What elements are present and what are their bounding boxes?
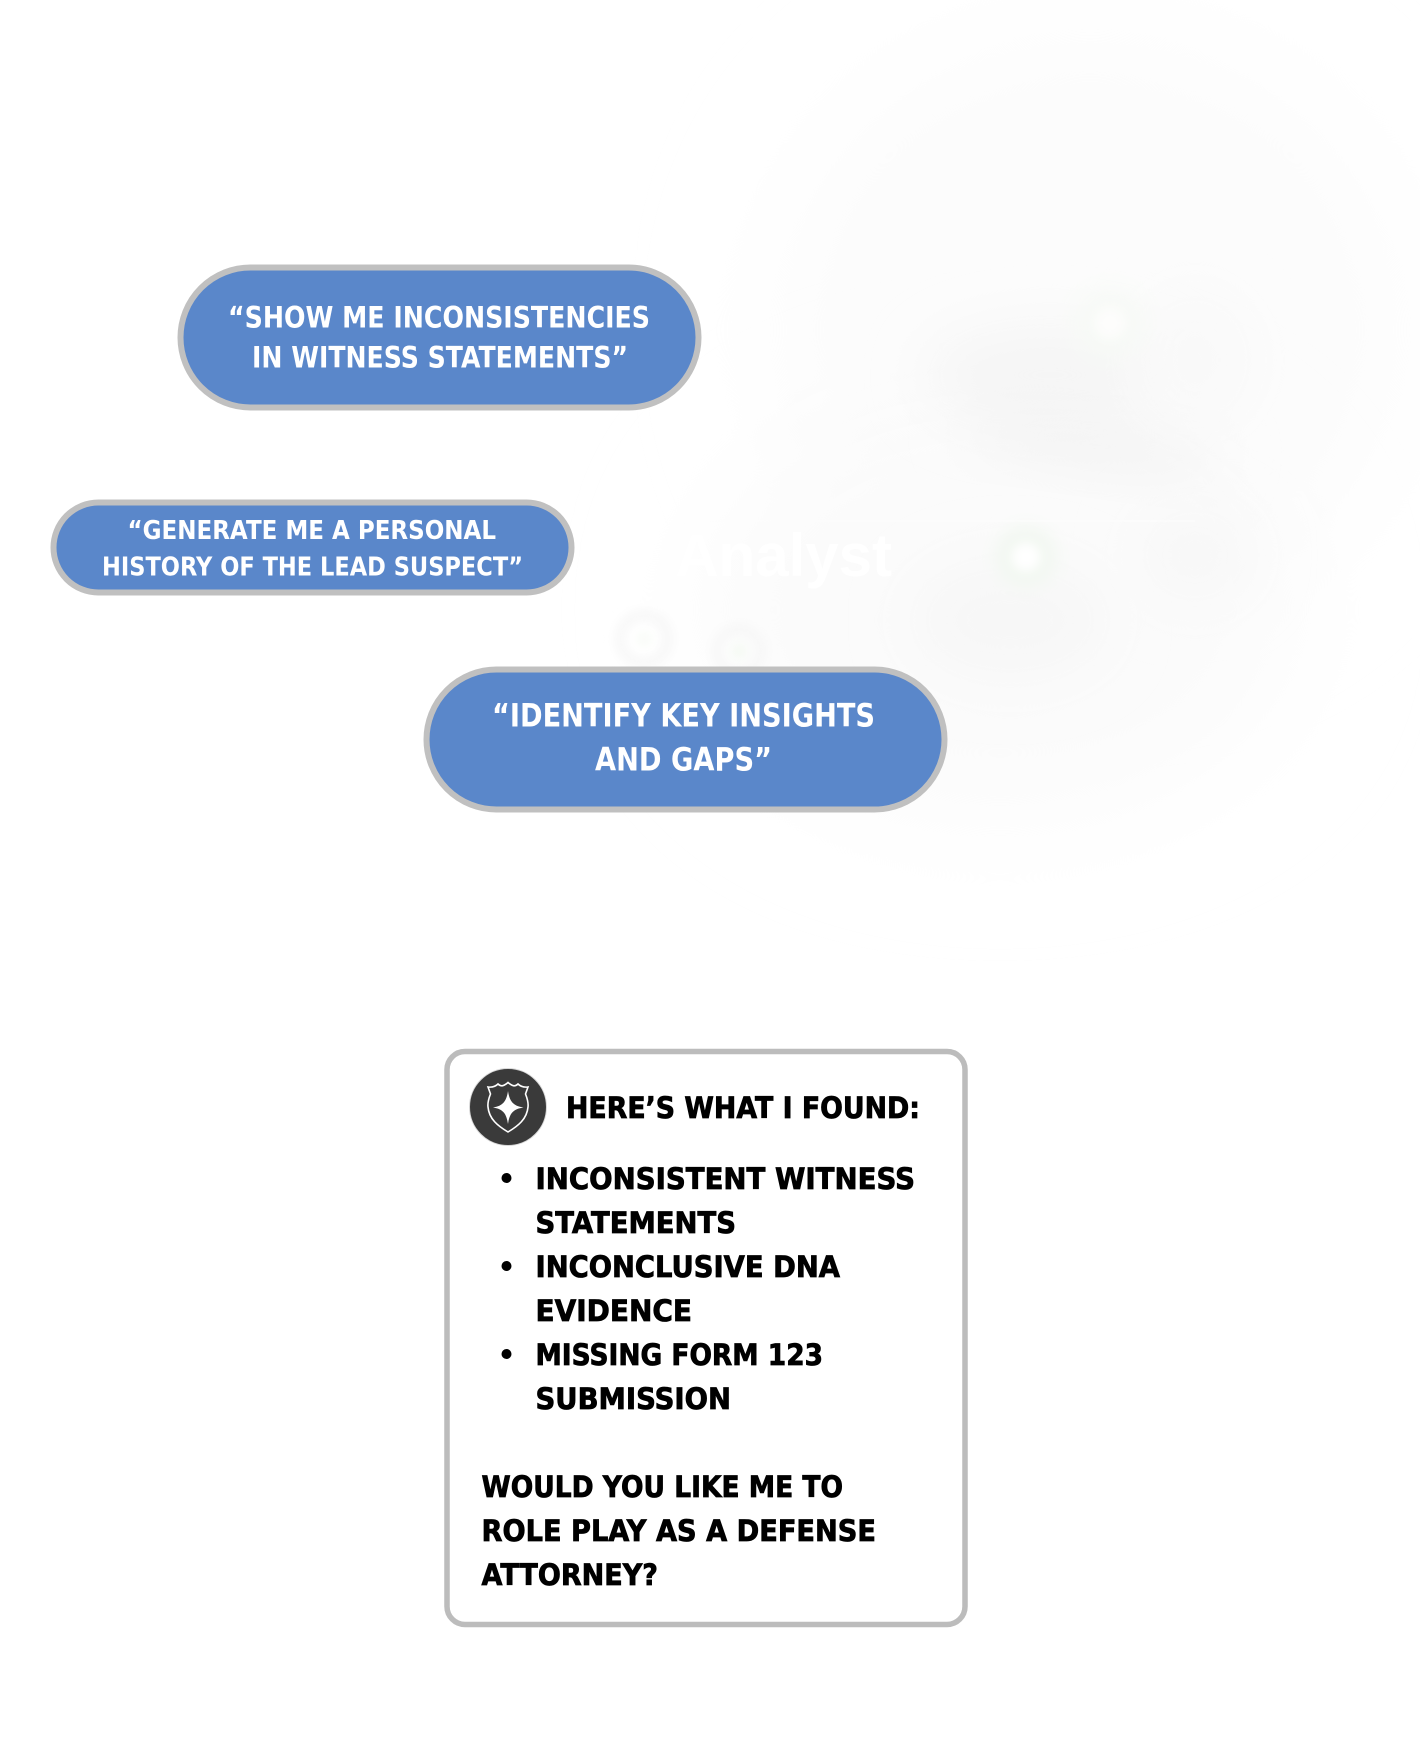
- card heading: HERE’S WHAT I FOUND:: [566, 1091, 920, 1125]
- follow-up question: ATTORNEY?: [482, 1558, 658, 1592]
- findings list: SUBMISSION: [536, 1382, 731, 1416]
- findings list: [502, 1162, 915, 1416]
- findings list: INCONSISTENT WITNESS: [536, 1162, 915, 1196]
- response card: [447, 1052, 965, 1624]
- prompt bubble: key insights: [426, 670, 944, 810]
- findings list: INCONCLUSIVE DNA: [536, 1250, 841, 1284]
- faint heading text: Analyst: [675, 522, 892, 589]
- prompt bubble: inconsistencies: [180, 268, 698, 408]
- background: faint blurred eye graphic: [620, 30, 1410, 820]
- prompt bubble: inconsistencies: IN WITNESS STATEMENTS”: [252, 340, 628, 374]
- icon: police badge: [470, 1068, 546, 1146]
- follow-up question: [482, 1470, 876, 1592]
- prompt bubble: personal history: “GENERATE ME A PERSONAL: [128, 516, 496, 546]
- prompt bubble: personal history: [54, 502, 572, 592]
- prompt bubble: key insights: AND GAPS”: [595, 740, 772, 778]
- findings list: EVIDENCE: [536, 1294, 692, 1328]
- follow-up question: ROLE PLAY AS A DEFENSE: [482, 1514, 876, 1548]
- prompt bubble: personal history: HISTORY OF THE LEAD SUSPECT”: [102, 552, 523, 582]
- findings list: STATEMENTS: [536, 1206, 736, 1240]
- findings list: MISSING FORM 123: [536, 1338, 823, 1372]
- prompt bubble: key insights: “IDENTIFY KEY INSIGHTS: [492, 696, 875, 734]
- follow-up question: WOULD YOU LIKE ME TO: [482, 1470, 843, 1504]
- prompt bubble: inconsistencies: “SHOW ME INCONSISTENCIES: [228, 300, 650, 334]
